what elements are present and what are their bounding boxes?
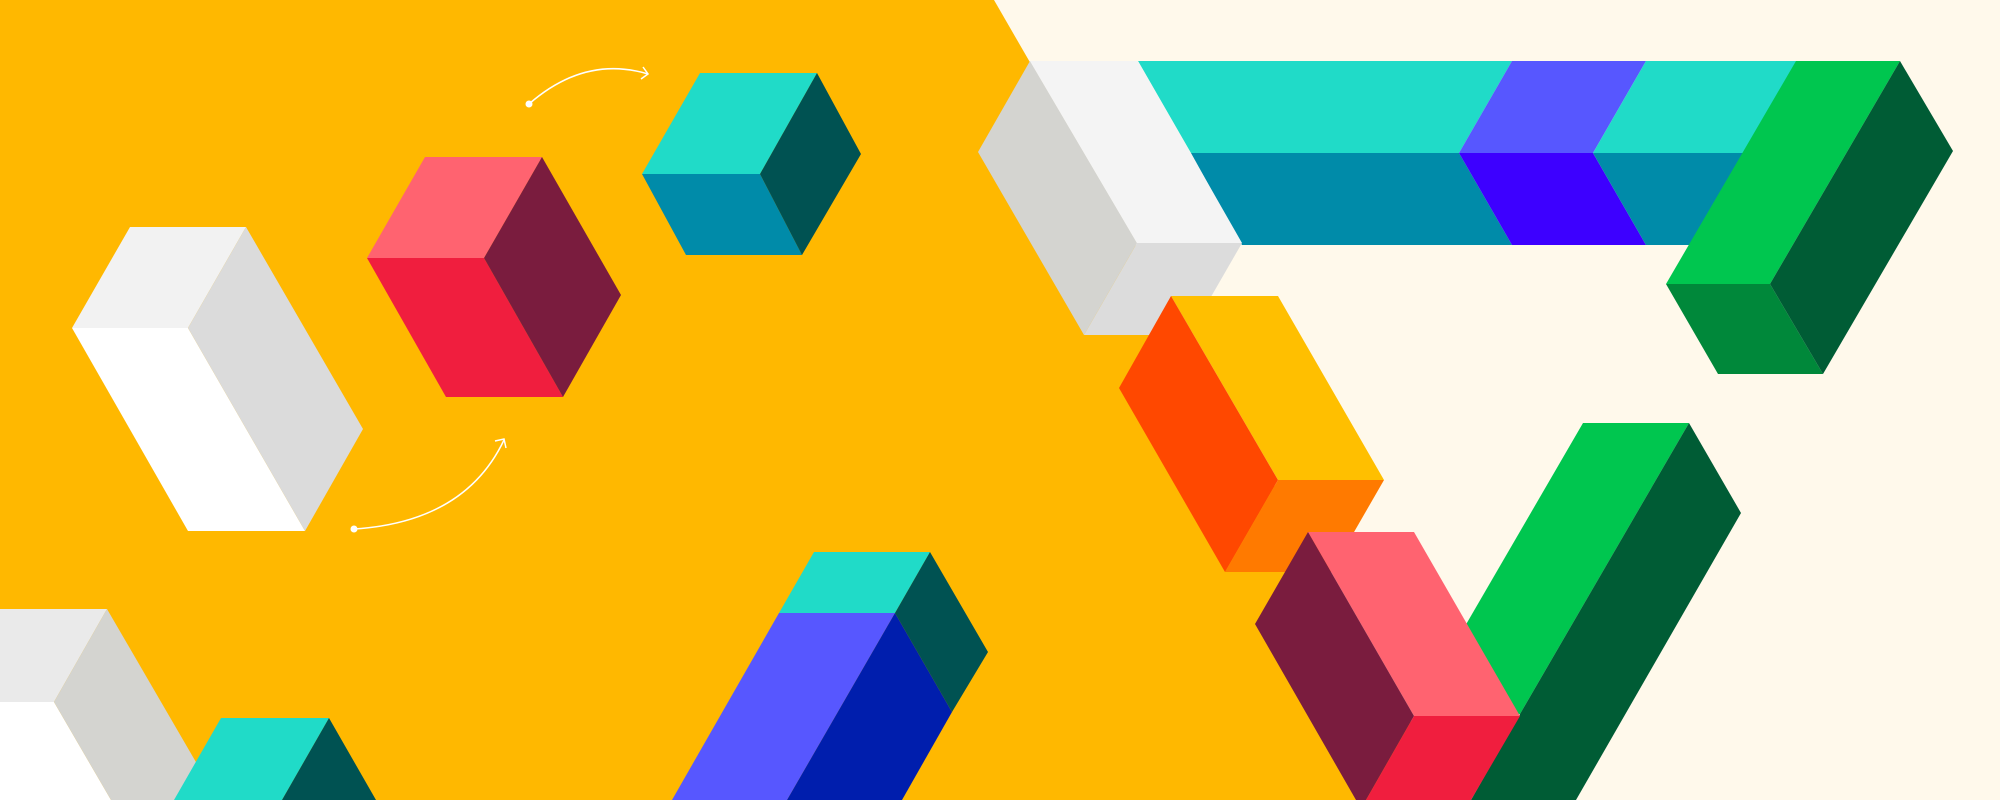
block: pink prism — [1255, 532, 1520, 800]
block: green bar bottom right — [1414, 423, 1741, 800]
block: blue prism bottom — [672, 552, 988, 800]
arrow: lower curved — [350, 439, 506, 532]
block: horizontal bar top right — [1138, 61, 1800, 245]
block: orange cube — [1119, 296, 1384, 572]
block: teal cube top — [642, 73, 861, 255]
background yellow panel — [0, 0, 1456, 800]
arrow: top curved — [526, 67, 648, 108]
block: grey prism joint — [978, 61, 1242, 335]
block: small teal bottom-left — [174, 718, 376, 800]
block: grey bottom-left — [0, 609, 218, 800]
block: green cube top right — [1666, 61, 1953, 374]
block: red cube — [367, 157, 621, 397]
block: white prism left — [72, 227, 363, 531]
